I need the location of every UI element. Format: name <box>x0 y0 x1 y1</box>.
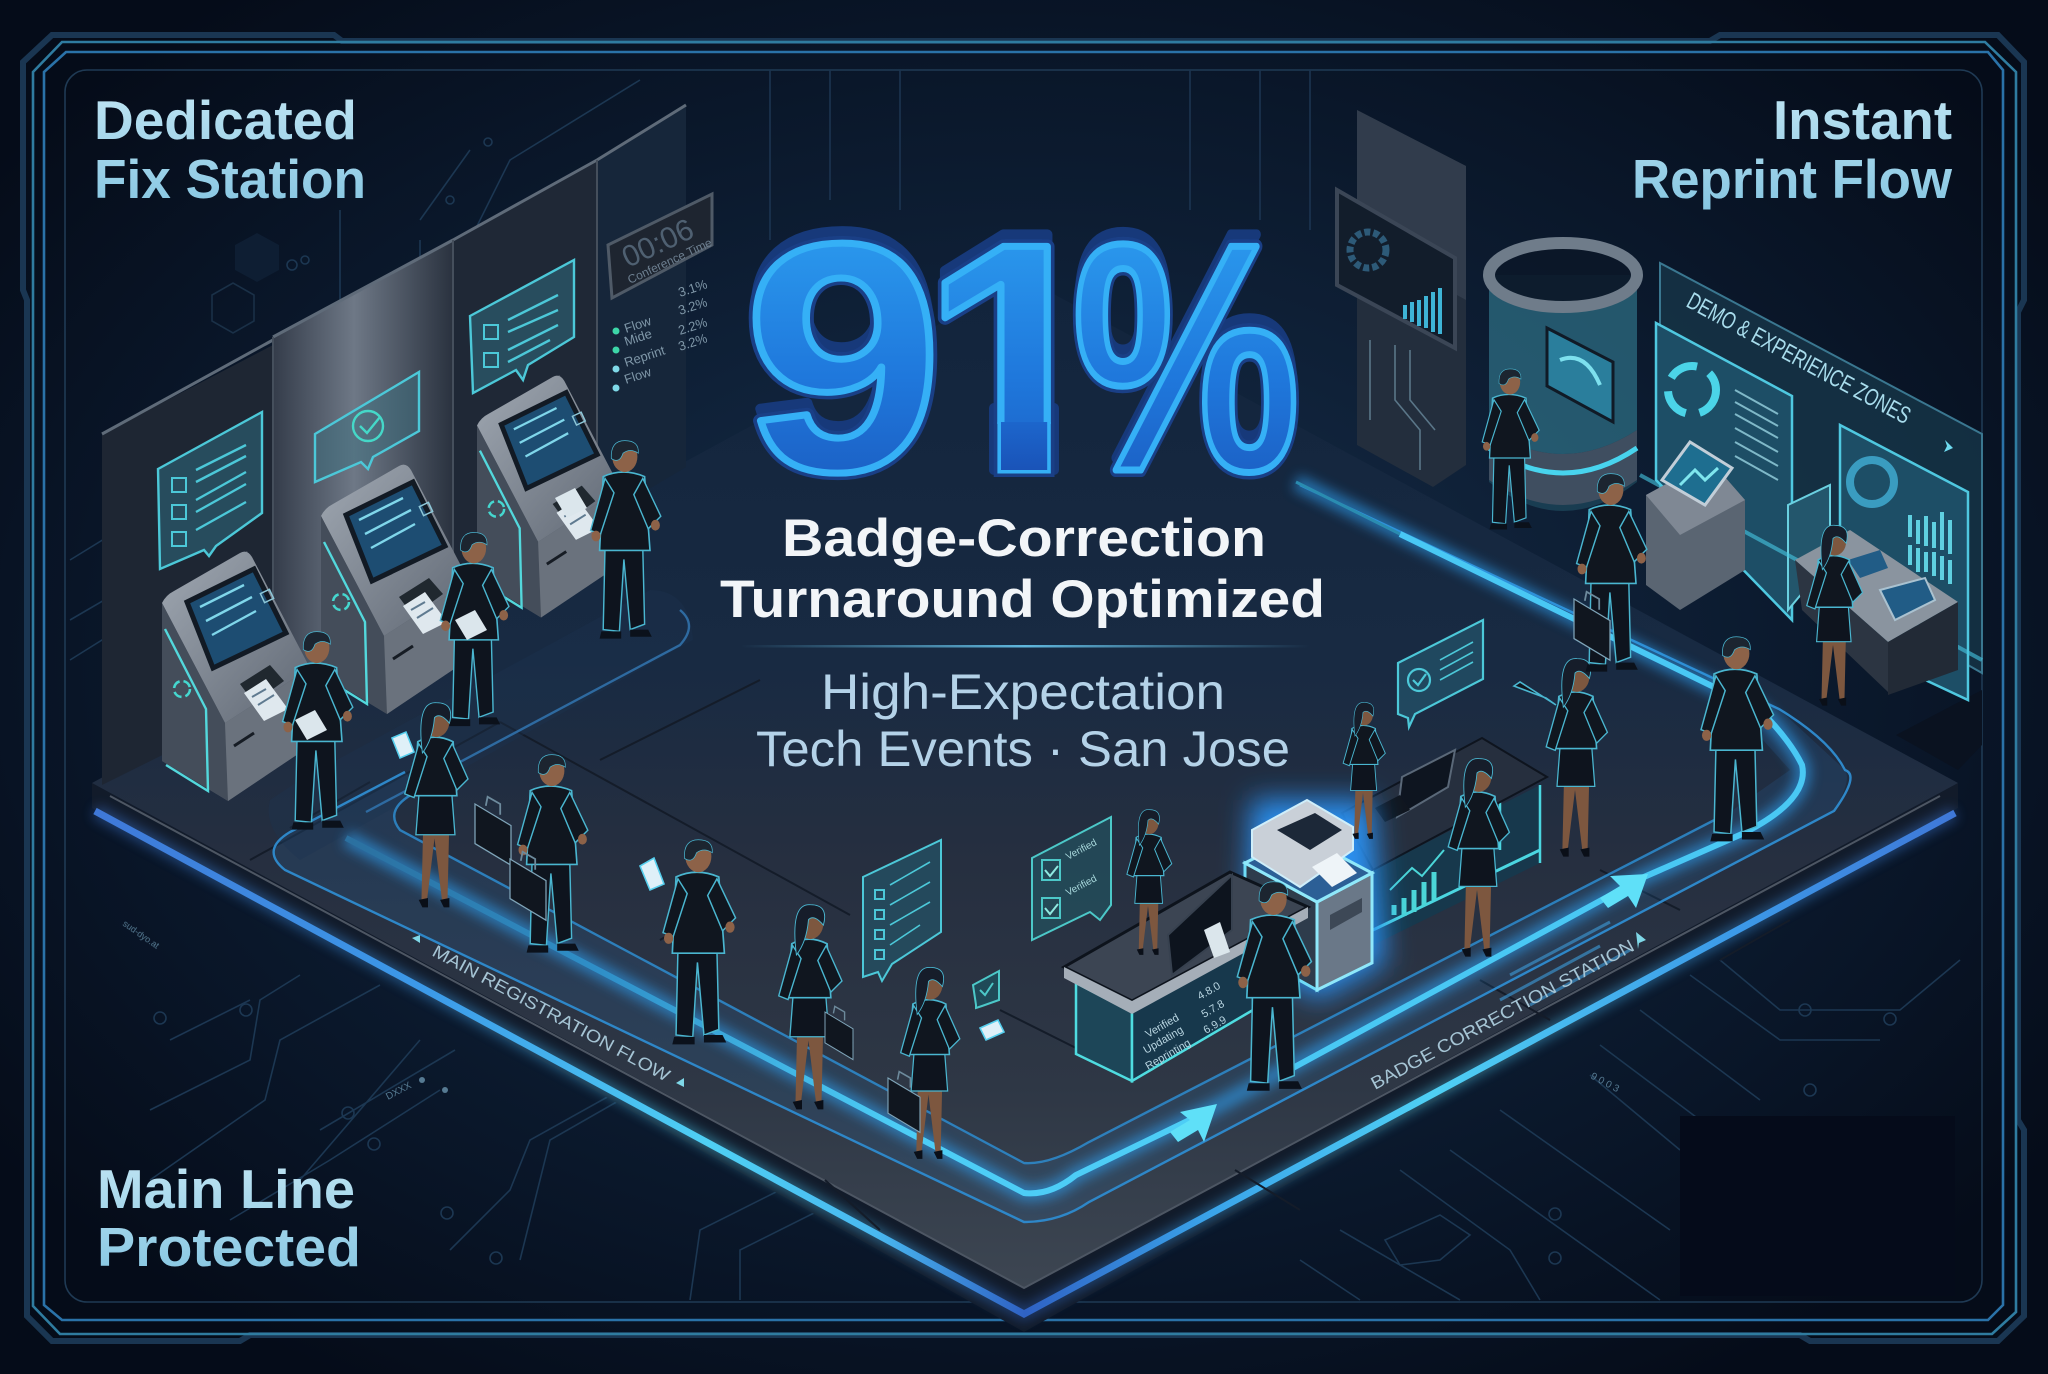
title: badge-correction turnaround optimized: Badge-Correction <box>782 509 1266 568</box>
kiosks <box>162 375 621 801</box>
heading: main line protected: Main Line <box>97 1158 355 1220</box>
heading: dedicated fix station: Dedicated <box>94 89 357 151</box>
front reception desk: Reprinting <box>1144 1037 1193 1073</box>
heading: instant reprint flow: Instant <box>1773 89 1952 151</box>
callout: queue checklist <box>863 840 941 981</box>
subtitle: high-expectation tech events san jose: High-Expectation <box>821 664 1225 720</box>
conference timer and stats: Flow <box>622 364 654 387</box>
extruded back layer <box>752 226 1297 475</box>
queue corridor lines <box>269 485 1850 1222</box>
back reception desk <box>1342 738 1547 945</box>
front face outline: 9 <box>744 177 943 539</box>
title: badge-correction turnaround optimized: Turnaround Optimized <box>720 570 1325 629</box>
demo and experience zones display: DEMO & EXPERIENCE ZONES <box>1682 288 1915 430</box>
front face <box>752 240 1296 477</box>
conference timer and stats: Flow <box>622 313 654 336</box>
callout: small check <box>973 971 999 1008</box>
front face outline: 1 <box>922 177 1110 540</box>
conference timer and stats: Mide <box>622 326 654 349</box>
conference timer and stats: Reprint <box>622 343 667 370</box>
small circuit marks <box>121 918 1621 1103</box>
front reception desk: Updating <box>1142 1024 1186 1057</box>
front reception desk: 4.8.0 <box>1196 980 1223 1003</box>
printer kiosk at demo zone <box>1646 442 1745 610</box>
subtitle: high-expectation tech events san jose: Tech Events · San Jose <box>756 721 1290 777</box>
callout: verified checklist: Verified <box>1064 837 1099 863</box>
front reception desk: 5.7.8 <box>1200 998 1227 1021</box>
small circuit marks: DXXX <box>384 1080 414 1103</box>
big stat: 91% <box>748 226 1299 480</box>
heading: main line protected: Protected <box>97 1216 361 1278</box>
dark patch lower right <box>1680 1116 1955 1296</box>
callout: checklist panel 3 <box>470 260 574 393</box>
demo and experience zones display <box>1640 263 1982 700</box>
back wall columns <box>770 70 1310 240</box>
front reception desk: 6.9.9 <box>1202 1014 1229 1037</box>
heading: dedicated fix station: Fix Station <box>94 148 366 210</box>
small circuit marks: 9 0 0 3 <box>1589 1071 1621 1095</box>
glass cylinder station <box>1489 243 1637 511</box>
callout: verified checklist <box>1032 817 1111 940</box>
front reception desk: Verified <box>1144 1012 1181 1041</box>
label: main registration flow <box>412 935 684 1087</box>
front reception desk <box>1064 872 1308 1081</box>
isometric floor platform <box>92 278 1982 1332</box>
conference timer and stats: Conference Time <box>625 235 714 287</box>
front face outline <box>748 236 1299 480</box>
demo console table <box>1795 530 1958 695</box>
left wall panels <box>102 105 686 785</box>
conference timer and stats: 00:06 <box>617 213 699 274</box>
arrow: flow direction 2 <box>1600 874 1648 908</box>
callout: verified checklist: Verified <box>1064 873 1099 899</box>
arrow: flow direction 1 <box>1170 1104 1217 1142</box>
callout: verified screen above staff <box>1398 620 1483 727</box>
conference timer and stats: 3.1% <box>676 276 710 300</box>
front face: % <box>1072 177 1300 540</box>
divider <box>740 645 1310 648</box>
extruded back layer: 1 <box>922 165 1110 528</box>
front face: 9 <box>744 177 943 539</box>
conference timer and stats: 3.2% <box>676 330 710 354</box>
callout: check mark panel 2 <box>315 372 419 482</box>
right wall panel with gear display <box>1337 110 1466 487</box>
extruded back layer: % <box>1072 165 1300 528</box>
label: badge correction station: BADGE CORRECTION STATION <box>1367 936 1638 1094</box>
callout: checklist panel 1 <box>158 412 262 569</box>
conference timer and stats: 2.2% <box>676 314 710 338</box>
conference timer and stats: 3.2% <box>676 294 710 318</box>
main flow path <box>346 482 1803 1193</box>
conference timer and stats <box>608 194 714 392</box>
heading: instant reprint flow: Reprint Flow <box>1632 148 1952 210</box>
attendees <box>283 369 1863 1159</box>
small circuit marks: sud-dyo.at <box>121 918 161 951</box>
front face: 1 <box>922 177 1110 540</box>
extruded back layer: 9 <box>744 165 943 527</box>
printer tower <box>1245 800 1385 1000</box>
front face outline: % <box>1072 177 1300 540</box>
label: main registration flow: MAIN REGISTRATION FLOW <box>429 941 674 1086</box>
